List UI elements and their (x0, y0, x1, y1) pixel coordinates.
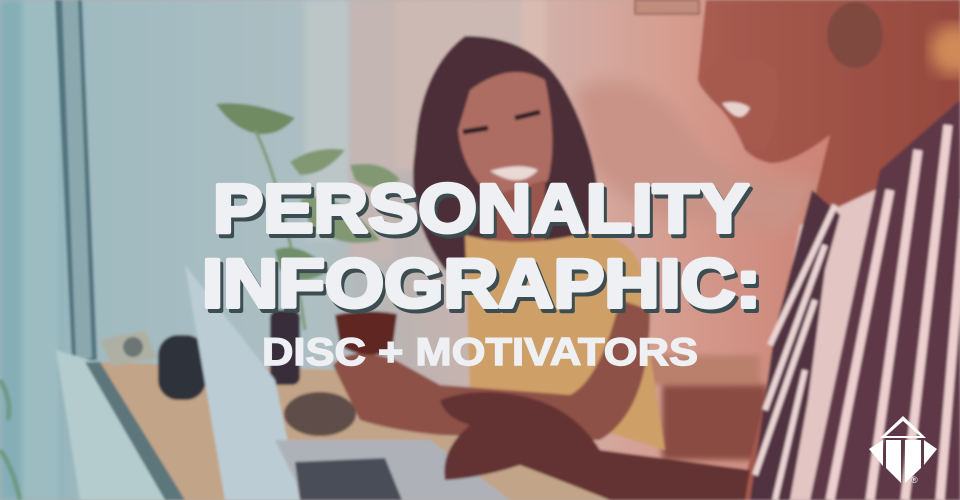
title shadow (205, 174, 764, 326)
camera and table sign (100, 310, 300, 400)
laptop (185, 265, 510, 500)
logo (869, 416, 937, 485)
title: PERSONALITY (213, 170, 749, 247)
man hand (440, 392, 750, 500)
window frame (0, 0, 190, 500)
logo: ® (911, 475, 918, 485)
title shadow: PERSONALITY (216, 174, 752, 251)
man (698, 0, 960, 500)
plant (216, 103, 400, 330)
title shadow: INFOGRAPHIC: (205, 249, 764, 326)
title (202, 170, 761, 322)
woman (333, 36, 665, 450)
subtitle: DISC + MOTIVATORS (262, 331, 698, 374)
title: INFOGRAPHIC: (202, 245, 761, 322)
plate and phone (284, 392, 356, 436)
table (100, 362, 650, 500)
